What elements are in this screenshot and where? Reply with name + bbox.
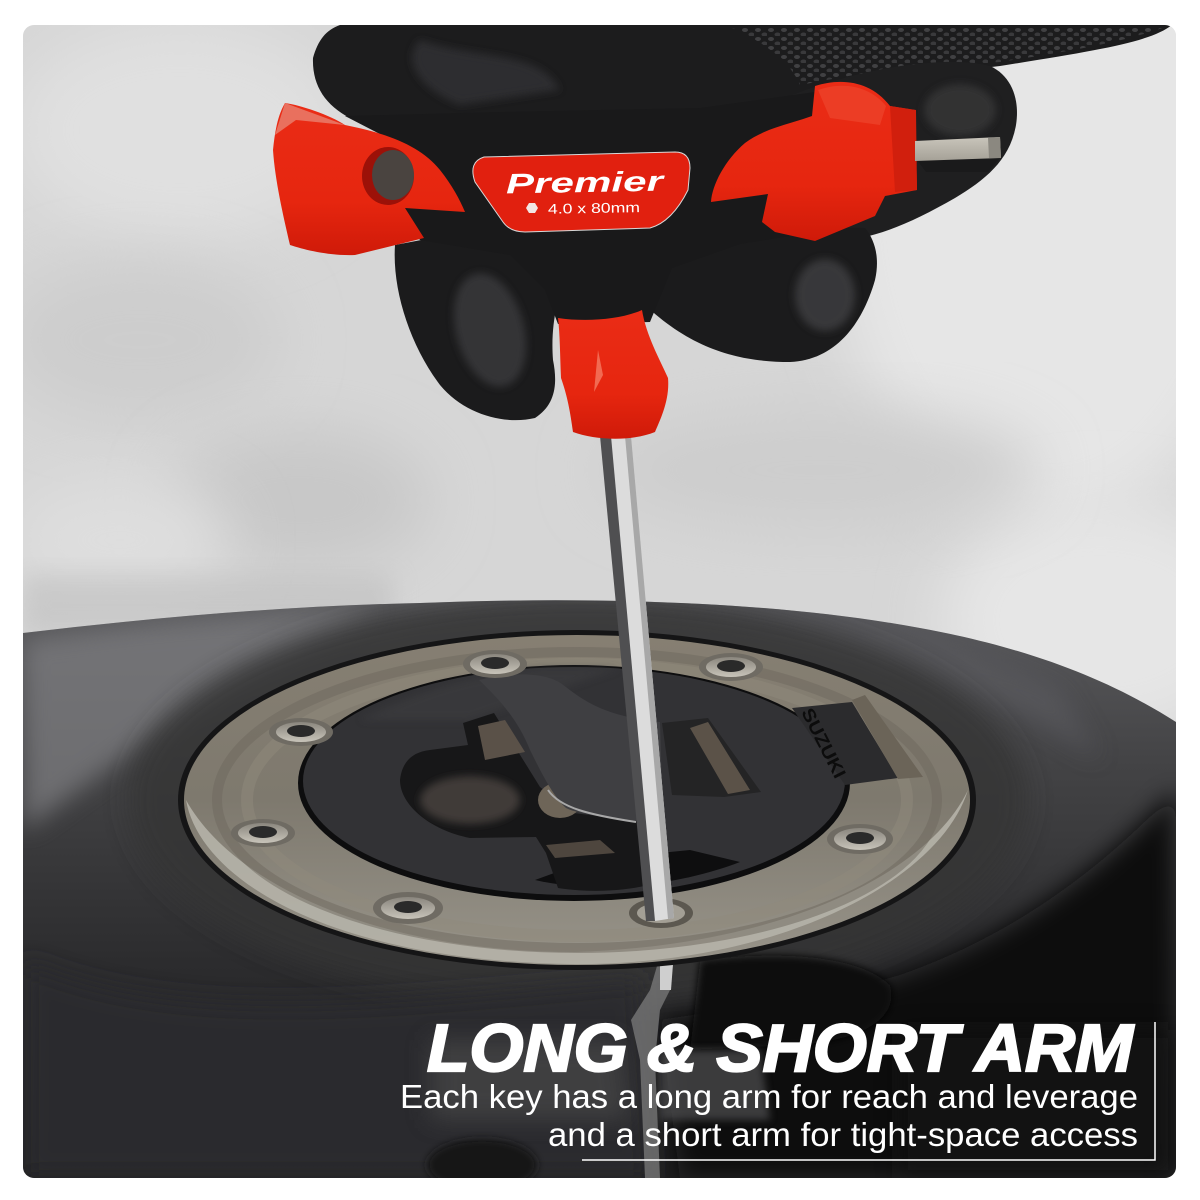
grip hole xyxy=(362,147,414,205)
ring bolts xyxy=(231,650,893,928)
finger: lower right xyxy=(640,225,877,362)
fuel cap disc xyxy=(298,665,850,901)
caption heading: LONG & SHORT ARM xyxy=(427,1011,1134,1086)
caption body: and a short arm for tight-space access xyxy=(548,1116,1138,1153)
caption bracket xyxy=(582,1022,1155,1160)
suzuki tab xyxy=(792,695,923,785)
badge logo: Premier xyxy=(506,166,666,199)
caption block xyxy=(400,1011,1155,1160)
handle black body xyxy=(345,105,780,324)
handle neck red xyxy=(558,310,668,439)
caption body: Each key has a long arm for reach and leverage xyxy=(400,1078,1138,1115)
hex icon xyxy=(526,203,538,213)
cap cavity xyxy=(400,713,668,891)
cap slot xyxy=(662,718,761,797)
tank seam stripe xyxy=(631,964,673,1178)
hex key long arm xyxy=(600,436,674,921)
fuel tank body xyxy=(23,590,1176,1191)
caption body xyxy=(400,1078,1138,1153)
cap lever xyxy=(479,674,662,822)
gloved hand back xyxy=(312,25,1170,116)
handle right red grip xyxy=(711,82,917,241)
finger: rear right xyxy=(846,62,1017,236)
suzuki tab: SUZUKI xyxy=(797,705,850,782)
finger: lower left xyxy=(395,225,560,420)
badge size: 4.0 x 80mm xyxy=(548,199,640,217)
t-handle tool xyxy=(273,82,917,439)
handle left red grip xyxy=(273,103,465,255)
premier badge xyxy=(473,152,690,232)
filler neck ring xyxy=(184,635,970,965)
hex key short arm xyxy=(915,137,1001,161)
filler ring recess xyxy=(178,630,976,970)
background wall xyxy=(0,0,1200,740)
